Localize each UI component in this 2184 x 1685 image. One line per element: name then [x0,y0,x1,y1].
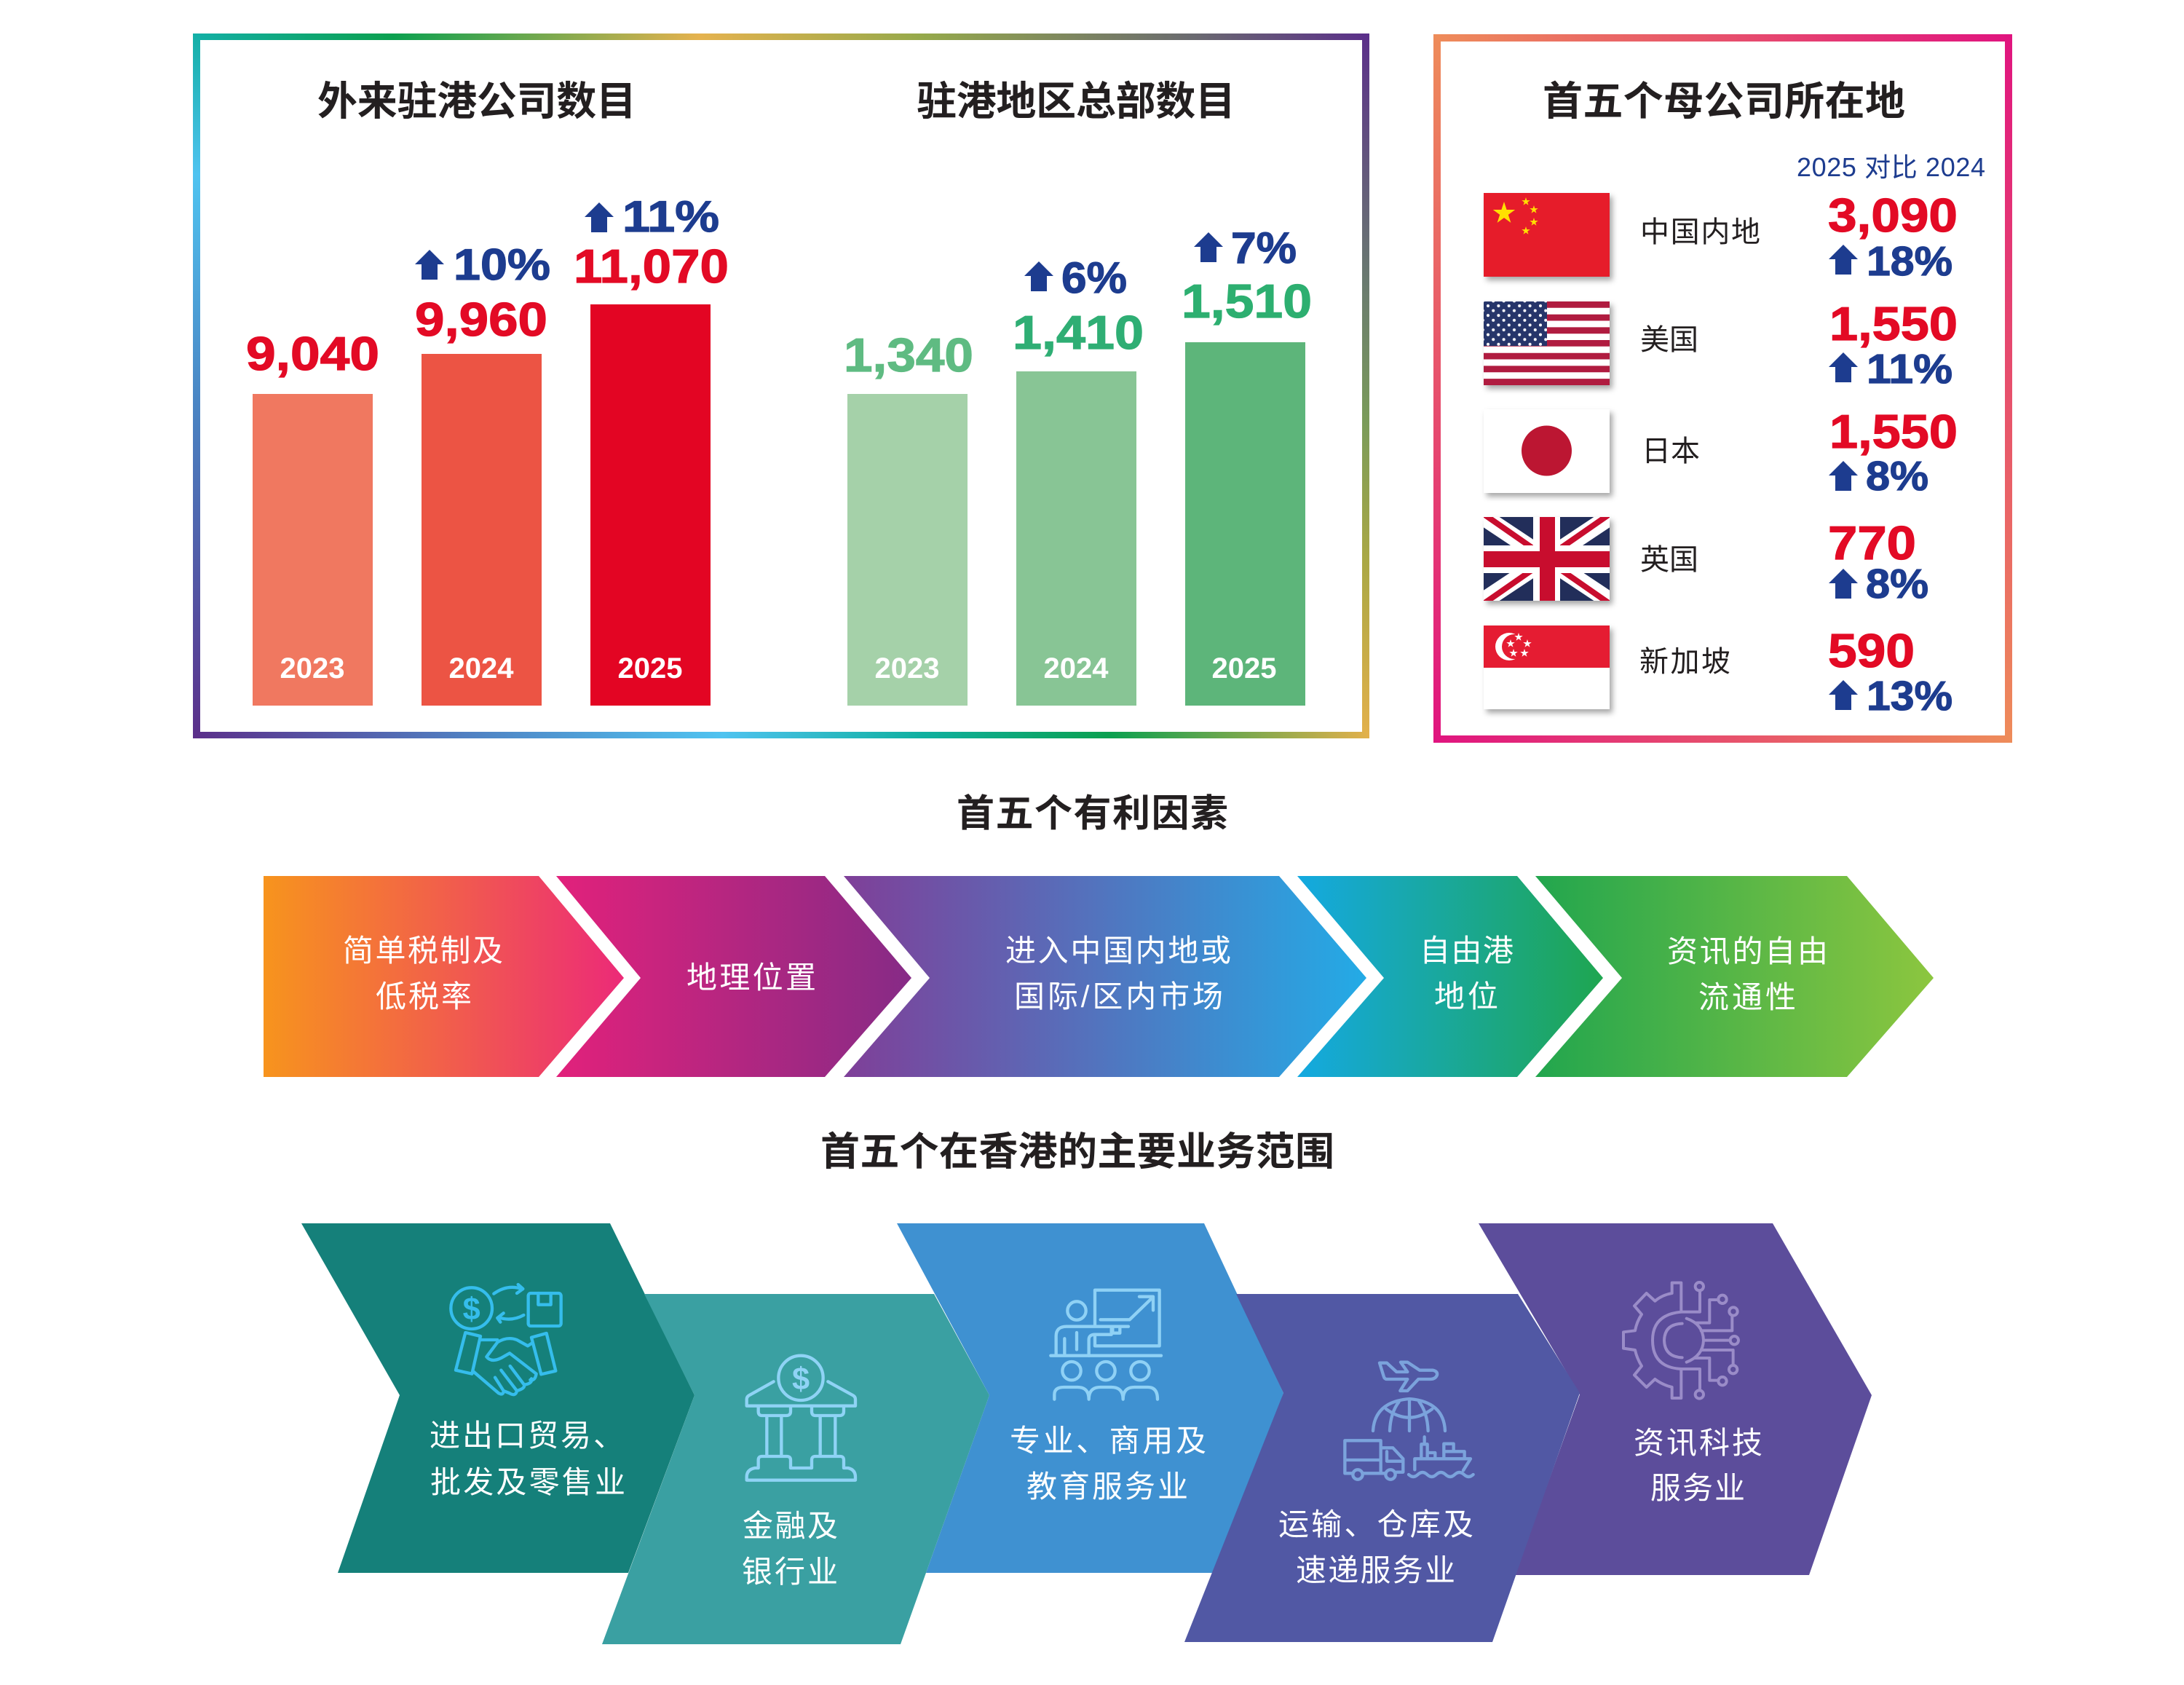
bar 2024: 1,410 [1013,306,1144,359]
row: Japan: 日本 [1642,435,1700,467]
row: Japan: 1,550 [1829,405,1958,458]
growth 2025: 7% [1194,224,1297,272]
arrow 5: free flow of information: 资讯的自由 [1667,934,1828,968]
row: Singapore: 13% [1867,673,1952,719]
row: United Kingdom [1484,514,1928,607]
icon: China flag [1484,193,1610,277]
growth 2025: 11% [585,192,719,241]
bar 2025: 2025 [1212,652,1276,684]
bar 2024 [1013,306,1144,706]
arrow 2: location [556,876,911,1077]
row: China [1484,189,1958,285]
bar 2024: 2024 [1044,652,1109,684]
arrow: information technology: 资讯科技 [1634,1426,1762,1460]
arrow: finance: 金融及 [743,1509,838,1543]
growth 2025: 7%: 7% [1231,224,1297,272]
row: Singapore: 590 [1828,624,1915,677]
bar 2023: 2023 [875,652,939,684]
arrow 3: market access: 进入中国内地或 [1005,934,1231,968]
arrow 5: free flow of information: 流通性 [1698,980,1796,1014]
row: United Kingdom: 770 [1828,516,1916,569]
growth 2024: 10% [415,240,550,289]
arrow 4: free port: 地位 [1434,979,1498,1014]
bar 2024: 2024 [449,652,514,684]
bar chart: overseas companies [246,192,729,706]
icon: Singapore flag [1484,626,1610,709]
row: United States: 1,550 [1829,297,1958,350]
icon: trade handshake: $ [463,1293,480,1327]
row: China: 3,090 [1828,189,1958,242]
arrow: information technology [1479,1223,1872,1575]
arrow: professional services: 专业、商用及 [1010,1424,1206,1458]
row: United Kingdom: 英国 [1640,544,1698,576]
arrow: logistics [1184,1294,1580,1642]
heading: regional headquarters: 驻港地区总部数目 [917,79,1235,124]
arrow: professional services: 教育服务业 [1026,1469,1188,1504]
arrow: logistics: 运输、仓库及 [1278,1507,1473,1542]
row: United Kingdom: 8% [1866,561,1928,607]
bar 2025 [574,240,729,706]
bar 2024 [415,293,547,706]
bar 2023: 2023 [280,652,344,684]
bar chart: regional headquarters [844,224,1312,706]
icon: bank: $ [792,1362,810,1397]
heading: overseas companies: 外来驻港公司数目 [317,79,636,124]
bar 2025 [1182,275,1312,706]
row: China: 18% [1867,238,1952,285]
growth 2024: 6% [1024,253,1127,302]
comparison note: 2025 对比 2024 [1797,152,1985,182]
arrow: finance [602,1294,989,1644]
heading: parent company locations: 首五个母公司所在地 [1543,79,1905,124]
row: United States: 美国 [1640,324,1698,356]
arrow: trade [301,1223,695,1573]
arrow strip: favourable factors [264,876,1934,1077]
icon: trade handshake [451,1285,561,1394]
heading: top five favourable factors: 首五个有利因素 [957,793,1228,835]
arrow: logistics: 速递服务业 [1296,1553,1455,1587]
bar 2023: 1,340 [844,328,973,382]
growth 2024: 10%: 10% [454,240,550,289]
arrow 4: free port: 自由港 [1420,934,1514,968]
growth 2025: 11%: 11% [622,192,719,241]
arrow 5: free flow of information [1535,876,1934,1077]
icon: Japan flag [1484,409,1610,493]
arrow 2: location: 地理位置 [687,960,816,995]
bar 2023 [246,327,379,706]
bar 2025: 11,070 [574,240,729,293]
bar 2025: 2025 [618,652,682,684]
icon: US flag [1484,301,1610,385]
bar 2024: 9,960 [415,293,547,346]
heading: top five business lines: 首五个在香港的主要业务范围 [820,1130,1334,1174]
arrow 4: free port [1297,876,1603,1077]
panel: company and regional HQ counts [193,33,1369,738]
row: United States [1484,297,1958,392]
growth 2024: 6%: 6% [1061,253,1127,302]
panel: top five parent company locations [1433,34,2012,743]
arrow 3: market access: 国际/区内市场 [1014,979,1223,1014]
icon: presenter [1051,1290,1161,1400]
row: Japan [1484,405,1958,500]
icon: bank [747,1356,855,1480]
bar 2023: 9,040 [246,327,379,380]
bar 2025: 1,510 [1182,275,1312,328]
arrow 1: simple tax [264,876,624,1077]
arrow strip: business lines [301,1223,1872,1644]
icon: logistics [1345,1362,1473,1480]
row: Japan: 8% [1866,453,1928,500]
row: Singapore [1484,624,1952,719]
row: Singapore: 新加坡 [1639,646,1730,678]
arrow: professional services [897,1223,1283,1573]
arrow: finance: 银行业 [742,1555,838,1589]
icon: tech gear [1623,1282,1738,1399]
arrow 1: simple tax: 简单税制及 [343,934,503,968]
bar 2023 [844,328,973,706]
arrow: trade: 进出口贸易、 [430,1418,624,1453]
row: China: 中国内地 [1640,216,1760,248]
icon: UK flag [1484,514,1610,604]
arrow: trade: 批发及零售业 [430,1465,625,1499]
row: United States: 11% [1867,346,1952,392]
arrow 1: simple tax: 低税率 [376,979,472,1014]
arrow: information technology: 服务业 [1650,1471,1745,1505]
arrow 3: market access [844,876,1366,1077]
